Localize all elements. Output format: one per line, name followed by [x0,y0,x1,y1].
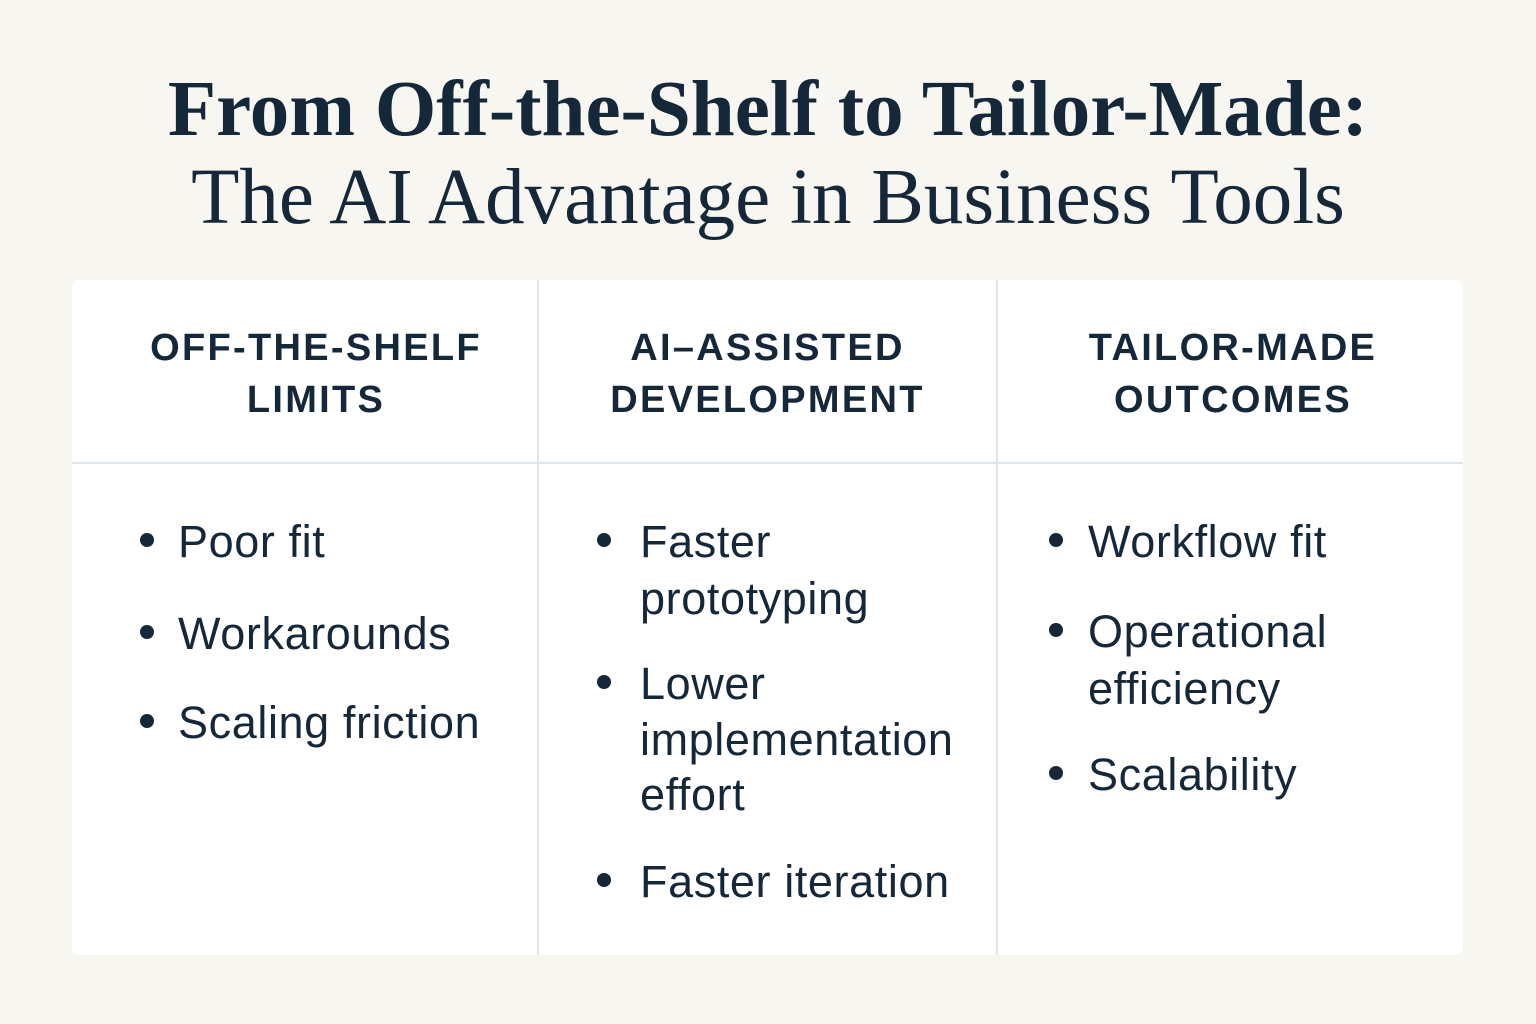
heading: tailor-made outcomes [1089,327,1377,421]
subtitle: The AI Advantage in Business Tools [191,154,1345,241]
list: ai-assisted development: Faster iteration [640,856,950,907]
list: tailor-made outcomes: efficiency [1088,663,1281,714]
list: off-the-shelf limits: Poor fit [178,516,325,567]
list: tailor-made outcomes [1049,516,1327,800]
list: off-the-shelf limits: Scaling friction [178,697,480,748]
heading: off-the-shelf limits [150,327,482,421]
list: ai-assisted development: prototyping [640,573,869,624]
list: off-the-shelf limits: Workarounds [178,608,451,659]
list: ai-assisted development: Faster [640,516,771,567]
list: ai-assisted development [597,516,954,907]
heading: ai-assisted development: AI–ASSISTED [630,327,905,369]
list: tailor-made outcomes: Operational [1088,606,1327,657]
title: From Off-the-Shelf to Tailor-Made: [168,66,1368,153]
list: ai-assisted development: implementation [640,714,954,765]
list: ai-assisted development: Lower [640,658,766,709]
list: ai-assisted development: effort [640,769,745,820]
panel: table card [72,280,1463,955]
heading: off-the-shelf limits: OFF-THE-SHELF [150,327,482,369]
heading: ai-assisted development [610,327,925,421]
heading: ai-assisted development: DEVELOPMENT [610,379,925,421]
list: tailor-made outcomes: Workflow fit [1088,516,1327,567]
heading: off-the-shelf limits: LIMITS [247,379,385,421]
list: off-the-shelf limits [140,516,480,748]
list: tailor-made outcomes: Scalability [1088,749,1297,800]
heading: tailor-made outcomes: OUTCOMES [1114,379,1352,421]
heading: tailor-made outcomes: TAILOR-MADE [1089,327,1377,369]
